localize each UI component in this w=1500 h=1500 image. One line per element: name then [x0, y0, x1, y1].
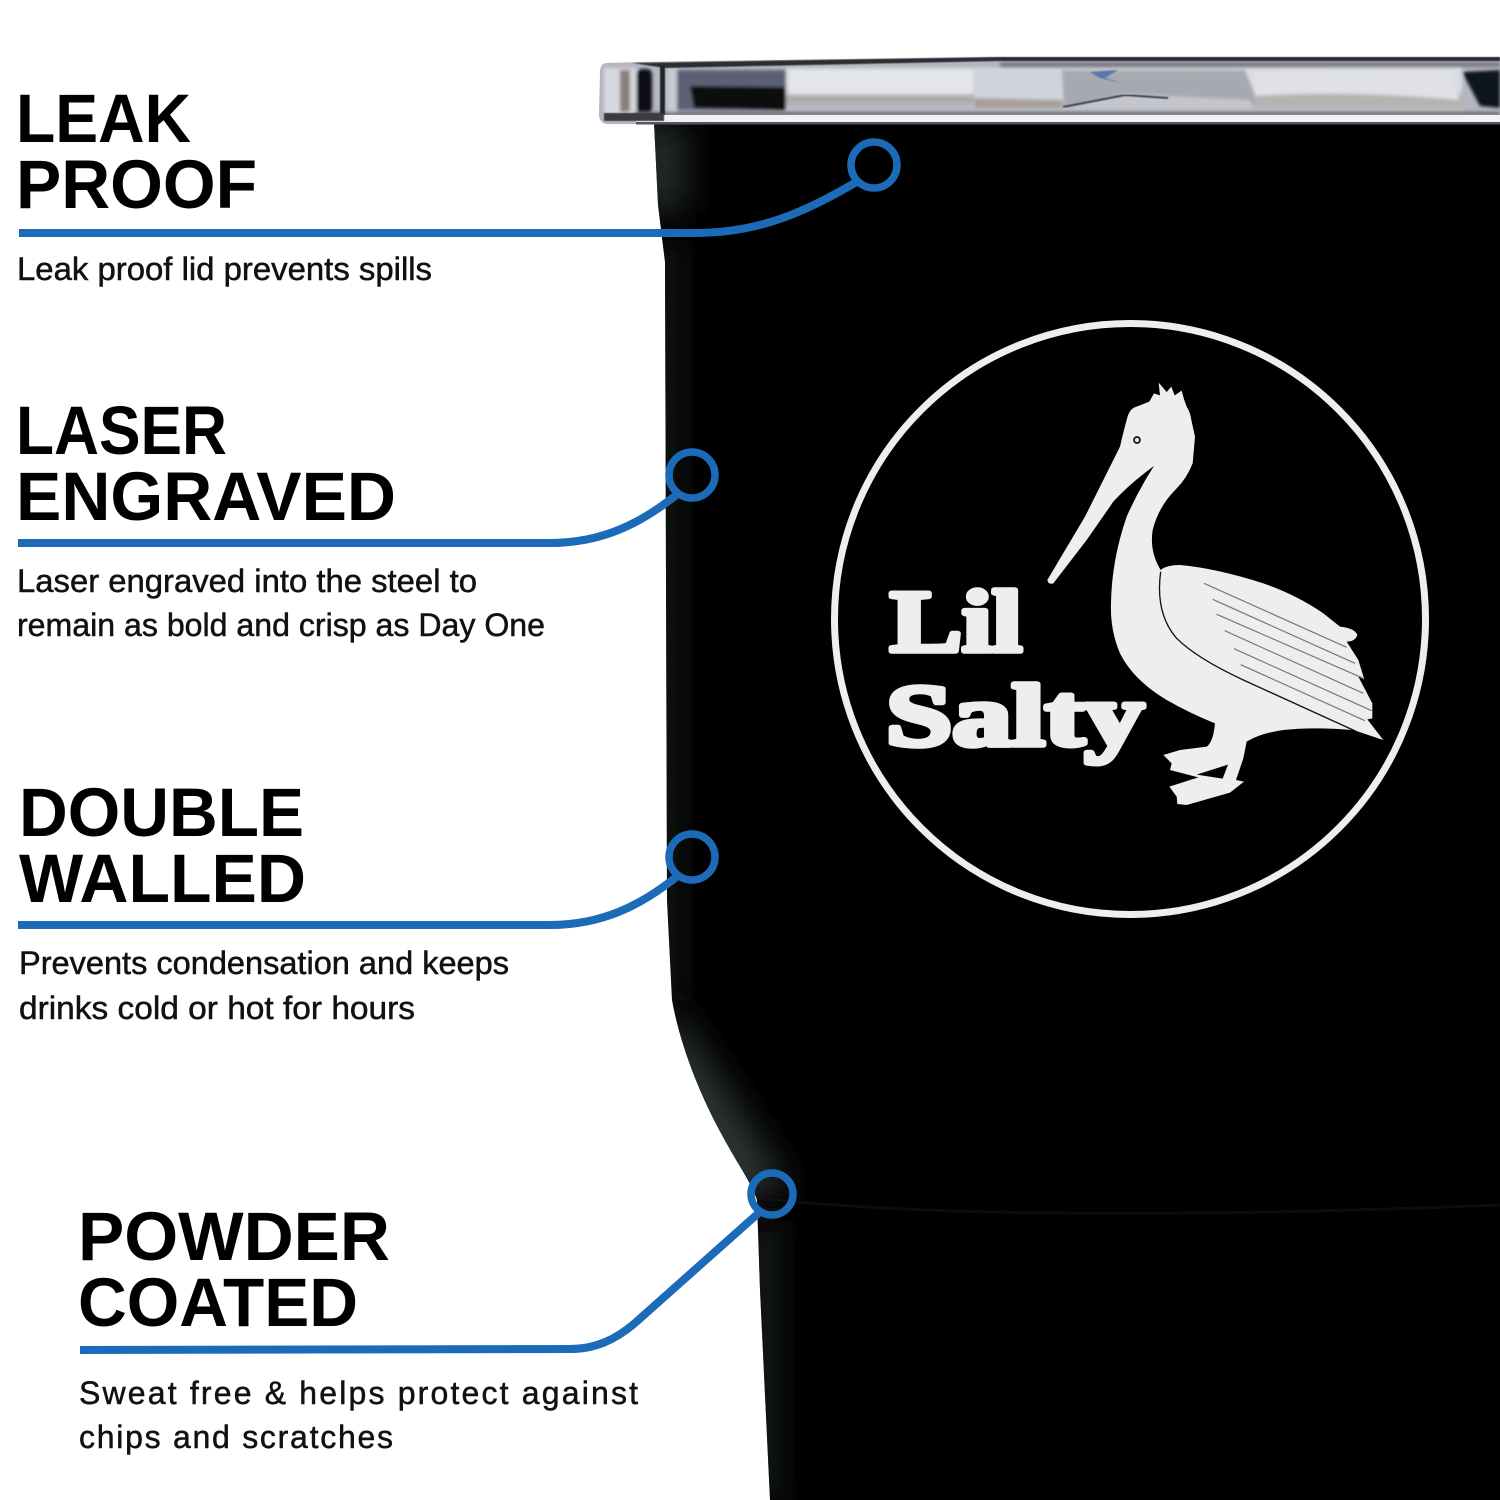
text: laser engraved description: remain as bold and crisp as Day One	[17, 607, 545, 643]
text: powder coated description: chips and scratches	[79, 1419, 393, 1455]
text: laser engraved description: Laser engraved into the steel to	[17, 563, 477, 599]
text: double walled description	[19, 945, 509, 1026]
heading: double walled: DOUBLE	[19, 774, 304, 851]
pelican illustration	[1047, 383, 1383, 805]
feature: laser engraved	[16, 392, 715, 643]
heading: laser engraved	[16, 392, 396, 535]
text: powder coated description	[79, 1375, 638, 1455]
callout line and ring: double walled	[18, 834, 715, 925]
callout line and ring: leak proof	[19, 142, 897, 233]
logo text: Lil Salty: Lil	[890, 574, 1022, 671]
tumbler lid	[599, 57, 1500, 124]
callout line and ring: powder coated	[80, 1173, 793, 1350]
heading: laser engraved: ENGRAVED	[16, 458, 396, 535]
text: laser engraved description	[17, 563, 545, 643]
callout line and ring: laser engraved	[18, 452, 715, 543]
heading: leak proof: LEAK	[16, 80, 191, 157]
logo text: Lil Salty	[886, 574, 1144, 765]
heading: powder coated: COATED	[78, 1264, 358, 1341]
feature: double walled	[18, 774, 715, 1026]
heading: powder coated: POWDER	[78, 1198, 390, 1275]
text: double walled description: drinks cold or hot for hours	[19, 990, 415, 1026]
text: double walled description: Prevents condensation and keeps	[19, 945, 509, 981]
tumbler body	[640, 122, 1500, 1500]
heading: double walled	[19, 774, 306, 917]
feature: powder coated	[78, 1173, 793, 1455]
text: leak proof description: Leak proof lid prevents spills	[17, 251, 432, 287]
logo ring	[834, 324, 1426, 914]
feature: leak proof	[16, 80, 897, 287]
heading: double walled: WALLED	[19, 840, 306, 917]
text: powder coated description: Sweat free & helps protect against	[79, 1375, 638, 1411]
heading: leak proof: PROOF	[16, 146, 257, 223]
heading: laser engraved: LASER	[16, 392, 227, 469]
heading: powder coated	[78, 1198, 390, 1341]
heading: leak proof	[16, 80, 257, 223]
logo text: Lil Salty: Salty	[886, 668, 1144, 765]
